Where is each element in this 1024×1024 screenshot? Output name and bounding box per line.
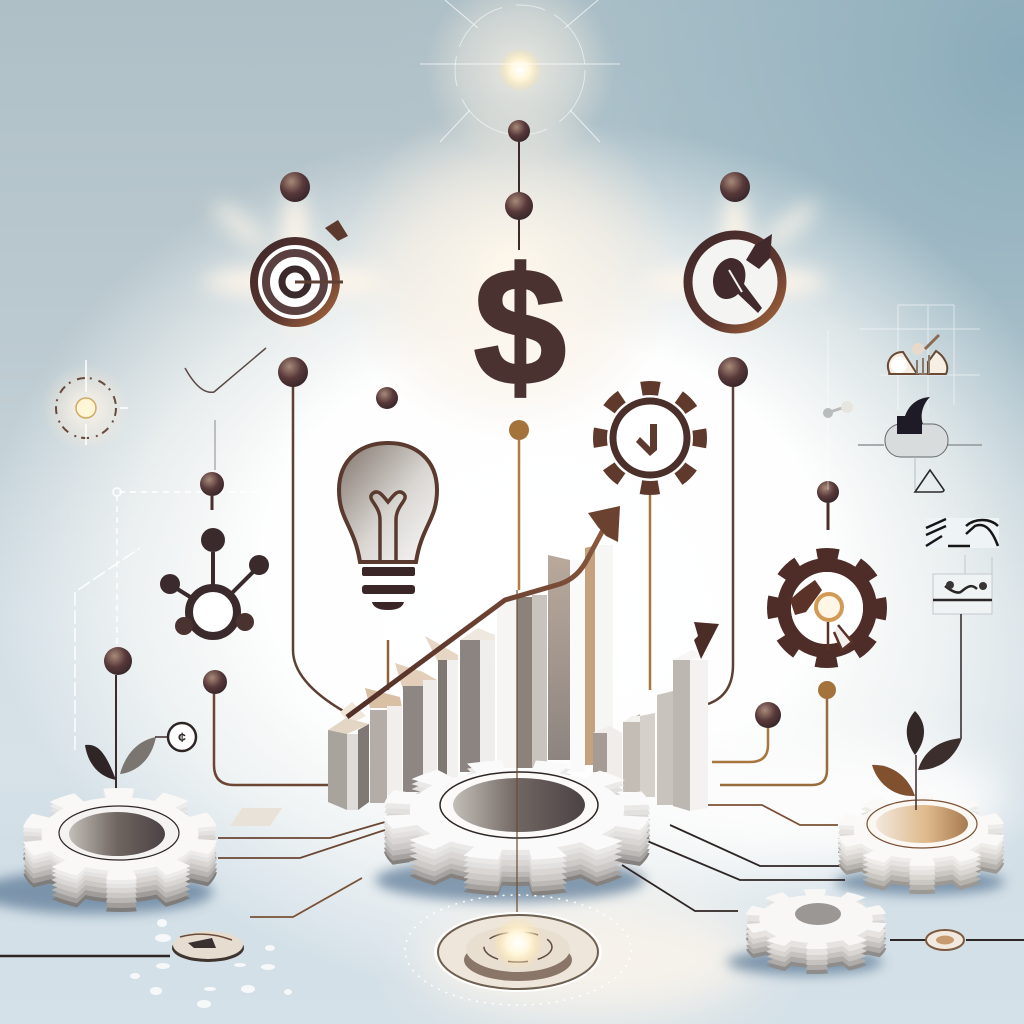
small gear hole <box>795 903 841 925</box>
coin icon beside the sprout <box>155 723 196 751</box>
bar 9 <box>570 560 585 772</box>
center vertical line through gear <box>516 590 518 925</box>
small ring on floor line right <box>926 930 964 950</box>
bar 15 <box>673 650 708 811</box>
icon: clock gear <box>600 388 700 488</box>
right gear socket <box>867 800 977 848</box>
icon: light bulb <box>339 443 437 610</box>
small floor plate near left gear <box>230 808 282 826</box>
icon: target <box>254 220 348 323</box>
left gear <box>26 790 214 910</box>
floor target plate <box>435 913 601 991</box>
icon: dollar sign: $ <box>474 235 566 420</box>
bar 8 <box>548 555 570 760</box>
sprout on right gear <box>872 711 962 810</box>
circuit lines on the floor <box>0 805 1024 956</box>
icon: prohibited tool <box>688 234 782 329</box>
left gear socket <box>59 806 179 860</box>
brown connector lines <box>116 385 828 822</box>
coin icon beside the sprout: ¢ <box>178 729 186 745</box>
bar 7 <box>517 595 547 768</box>
connector line from top node <box>518 142 520 250</box>
center gear <box>388 762 646 894</box>
mini chart icon <box>888 335 947 375</box>
glowing cog on left <box>42 360 130 452</box>
sprout on left gear <box>85 737 156 780</box>
growth arrow <box>347 506 620 717</box>
dashed guide lines on the left <box>75 488 290 750</box>
bar chart <box>328 545 708 811</box>
small curve node upper left <box>185 348 266 392</box>
floor sparkle dots <box>130 919 292 1008</box>
patterned strip icon <box>926 518 999 548</box>
light flares behind the target and prohibited icons <box>203 190 827 330</box>
cloud with dark fin icon <box>858 397 982 490</box>
bar 10 <box>585 545 613 765</box>
sun glow at the top <box>420 0 620 165</box>
center gear socket <box>440 772 598 838</box>
bar 11 <box>593 726 622 785</box>
bar 3 <box>395 663 437 792</box>
small node on guide line <box>823 401 853 418</box>
bar 14 <box>657 691 673 805</box>
bar 13 <box>640 713 655 797</box>
floor shadows <box>0 858 1005 975</box>
node balls <box>104 120 839 728</box>
outline triangle icon <box>915 470 944 492</box>
small arrow on last bar <box>684 622 719 659</box>
bar 12 <box>623 714 641 792</box>
faint grid on right <box>828 305 980 490</box>
floor coin with icon <box>172 931 244 962</box>
icon: gear with key <box>774 555 880 661</box>
bar 2 <box>365 688 402 803</box>
bar 4 <box>425 636 458 780</box>
dotted ring around the plate <box>405 895 631 1005</box>
bar 6 <box>497 595 517 768</box>
bar 1 <box>328 702 369 810</box>
bar 5 <box>460 628 495 772</box>
icon: network hub <box>160 552 269 636</box>
wave card icon <box>933 555 992 738</box>
right gear <box>840 795 1002 893</box>
small front gear <box>748 890 884 973</box>
